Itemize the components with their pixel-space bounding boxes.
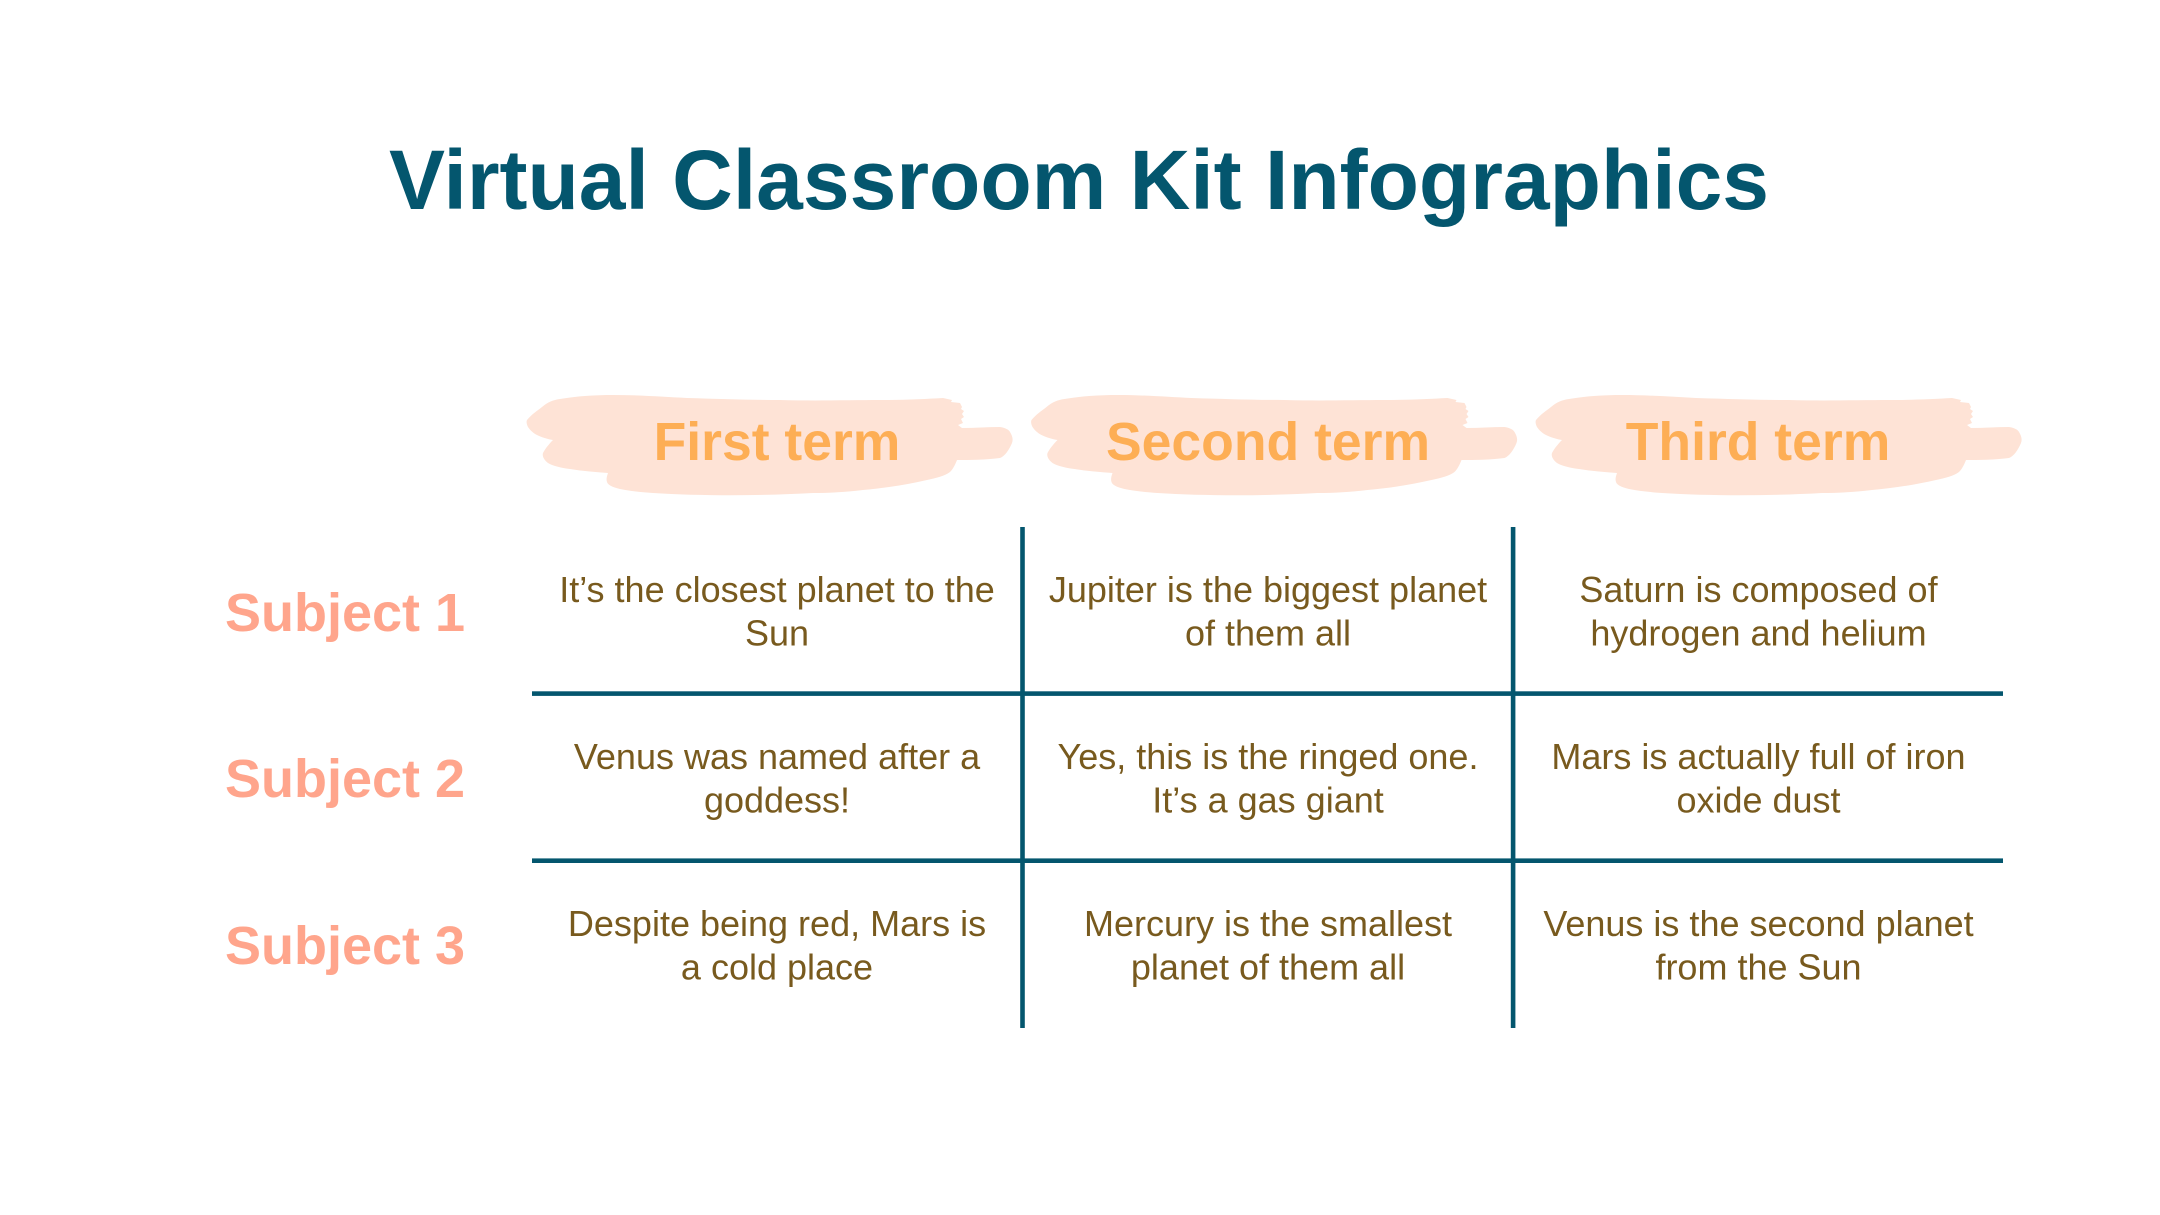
row label: subject 3: Subject 3 bbox=[225, 916, 465, 976]
cell: subject 1 second term: of them all bbox=[1185, 612, 1351, 654]
cell: subject 2 first term bbox=[574, 736, 981, 820]
panel: second term header bbox=[1031, 395, 1517, 495]
cell: subject 1 first term bbox=[559, 569, 995, 654]
cell: subject 3 first term: Despite being red, Mars is bbox=[568, 903, 986, 944]
cell: subject 2 third term: oxide dust bbox=[1676, 780, 1841, 820]
cell: subject 1 third term: Saturn is composed of bbox=[1579, 569, 1939, 610]
panel: first term header: First term bbox=[654, 413, 900, 472]
cell: subject 3 third term bbox=[1543, 903, 1974, 988]
cell: subject 2 third term bbox=[1551, 736, 1966, 820]
cell: subject 3 first term: a cold place bbox=[681, 946, 873, 988]
cell: subject 3 third term: from the Sun bbox=[1655, 946, 1862, 988]
cell: subject 1 first term: It’s the closest planet to the bbox=[559, 569, 995, 610]
cell: subject 3 second term bbox=[1084, 903, 1452, 988]
cell: subject 1 third term: hydrogen and helium bbox=[1590, 612, 1927, 654]
cell: subject 2 second term: Yes, this is the ringed one. bbox=[1058, 736, 1478, 777]
panel: first term header bbox=[527, 395, 1013, 495]
row label: subject 2: Subject 2 bbox=[225, 749, 465, 809]
cell: subject 1 third term bbox=[1579, 569, 1939, 654]
brush stroke: third term bbox=[1536, 395, 2022, 495]
cell: subject 3 third term: Venus is the second planet bbox=[1543, 903, 1974, 944]
cell: subject 1 second term: Jupiter is the biggest planet bbox=[1049, 569, 1487, 610]
cell: subject 3 second term: Mercury is the smallest bbox=[1084, 903, 1452, 944]
cell: subject 3 second term: planet of them all bbox=[1131, 946, 1405, 988]
panel: third term header bbox=[1536, 395, 2022, 495]
cell: subject 2 first term: goddess! bbox=[704, 780, 850, 820]
cell: subject 2 second term: It’s a gas giant bbox=[1152, 780, 1384, 820]
title: Virtual Classroom Kit Infographics bbox=[389, 133, 1769, 227]
brush stroke: first term bbox=[527, 395, 1013, 495]
cell: subject 3 first term bbox=[568, 903, 986, 988]
cell: subject 1 second term bbox=[1049, 569, 1487, 654]
cell: subject 2 second term bbox=[1058, 736, 1478, 820]
panel: third term header: Third term bbox=[1626, 413, 1890, 472]
row label: subject 1: Subject 1 bbox=[225, 583, 465, 643]
table grid lines bbox=[532, 527, 2003, 1028]
cell: subject 1 first term: Sun bbox=[745, 612, 809, 654]
brush stroke: second term bbox=[1031, 395, 1517, 495]
cell: subject 2 third term: Mars is actually full of iron bbox=[1551, 736, 1966, 777]
cell: subject 2 first term: Venus was named after a bbox=[574, 736, 981, 777]
panel: second term header: Second term bbox=[1106, 413, 1430, 472]
